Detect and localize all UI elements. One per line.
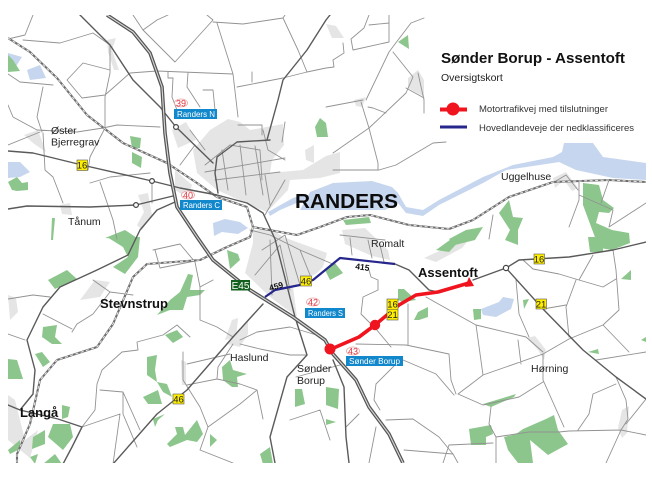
legend: red road symbol bbox=[440, 102, 467, 116]
place label: Haslund: Haslund bbox=[230, 352, 269, 364]
exit 39: Randers N bbox=[174, 98, 217, 119]
place label: Stevnstrup: Stevnstrup bbox=[100, 296, 168, 311]
road shield 21 east: 21 bbox=[536, 300, 546, 310]
road shields 16 and 21: 21 bbox=[387, 310, 398, 321]
road shield 16 west: 16 bbox=[77, 160, 87, 172]
road shield E45: E45 bbox=[232, 281, 250, 292]
place label: Tånum: Tånum bbox=[68, 216, 101, 228]
place label: Øster Bjerregrav: Bjerregrav bbox=[51, 136, 100, 148]
road shield 46 south: 46 bbox=[173, 394, 184, 406]
exit 40: Randers C: Randers C bbox=[183, 200, 220, 210]
place label: Langå: Langå bbox=[20, 405, 59, 420]
exit 40: Randers C bbox=[180, 190, 222, 210]
city label: Randers: RANDERS bbox=[295, 190, 398, 213]
exit 39: Randers N: 39 bbox=[176, 98, 186, 108]
lakes and river bbox=[8, 53, 646, 317]
exit 42: Randers S: 42 bbox=[308, 298, 318, 308]
exit 42: Randers S: Randers S bbox=[308, 308, 343, 318]
legend: blue road symbol bbox=[440, 126, 467, 128]
place label: Sønder Borup: Sønder bbox=[297, 363, 331, 375]
exit 43: Sønder Borup: Sønder Borup bbox=[349, 356, 400, 366]
exit 42: Randers S bbox=[305, 298, 345, 318]
road number 415: 415 bbox=[355, 261, 370, 273]
motor traffic road (red) bbox=[324, 277, 474, 354]
legend: blue road text: Hovedlandeveje der nedklassificeres bbox=[479, 123, 634, 133]
exit 39: Randers N: Randers N bbox=[177, 109, 215, 119]
exit 40: Randers C: 40 bbox=[183, 190, 193, 200]
downgraded main road (blue) bbox=[265, 258, 395, 297]
title: Sønder Borup - Assentoft bbox=[441, 51, 625, 67]
road shields 16 and 21 bbox=[387, 299, 398, 321]
exit 43: Sønder Borup bbox=[346, 346, 403, 366]
place label: Assentoft: Assentoft bbox=[418, 265, 479, 280]
road shield 16 east: 16 bbox=[534, 254, 544, 266]
subtitle: Oversigtskort bbox=[441, 72, 503, 84]
place label: Hørning: Hørning bbox=[531, 363, 569, 375]
road shields 16 and 21: 16 bbox=[387, 300, 398, 310]
place label: Sønder Borup: Borup bbox=[297, 375, 325, 387]
place label: Øster Bjerregrav: Øster bbox=[51, 125, 77, 137]
place label: Uggelhuse: Uggelhuse bbox=[501, 171, 551, 183]
exit 43: Sønder Borup: 43 bbox=[348, 346, 358, 356]
legend: red road text: Motortrafikvej med tilslutninger bbox=[479, 104, 608, 114]
road shield 46 north: 46 bbox=[301, 276, 311, 288]
road number 459: 459 bbox=[268, 280, 284, 293]
interchanges bbox=[134, 125, 509, 271]
motorway E45 bbox=[107, 15, 403, 463]
place label: Romalt: Romalt bbox=[371, 238, 404, 250]
